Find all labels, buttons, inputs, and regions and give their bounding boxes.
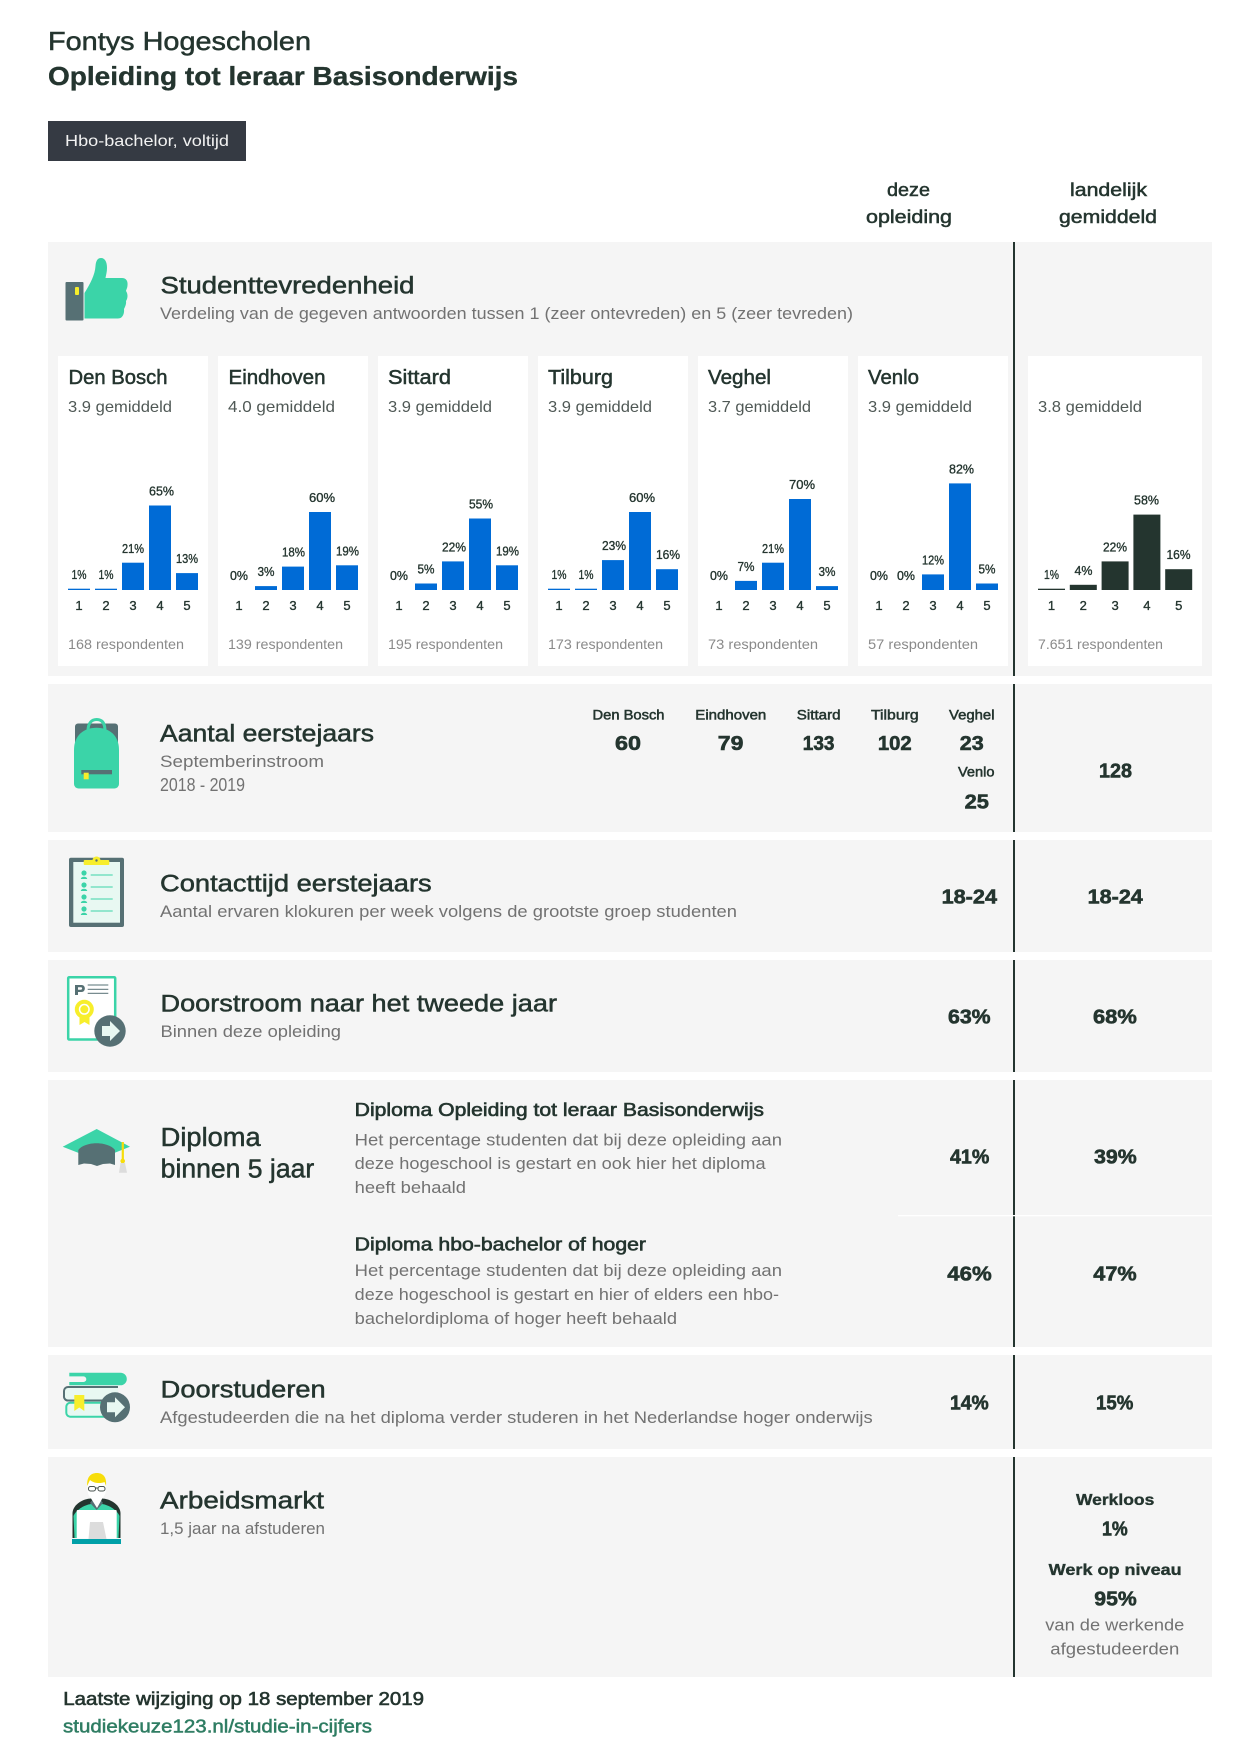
bar chart: Tilburg: 3 xyxy=(609,598,617,613)
subheading: 1,5 jaar na afstuderen: 1,5 jaar na afstuderen xyxy=(160,1519,325,1538)
card: Sittard: 195 respondenten xyxy=(388,636,503,652)
bar chart: landelijk: 4 xyxy=(1143,598,1151,613)
bar chart: Tilburg: 5 xyxy=(663,598,671,613)
card: Eindhoven: 4.0 gemiddeld xyxy=(228,399,335,416)
icon: backpack xyxy=(74,720,119,788)
subheading: septemberinstroom xyxy=(160,752,324,795)
block: diploma hbo-bachelor: Diploma hbo-bachelor of hoger xyxy=(355,1235,646,1255)
stat: werk op niveau: afgestudeerden xyxy=(1050,1639,1179,1658)
bar chart: Tilburg: 1 xyxy=(555,598,563,613)
bar chart: Eindhoven: 3 xyxy=(289,598,297,613)
bar chart: Venlo: 82% xyxy=(949,461,974,476)
bar chart: Eindhoven: 3% xyxy=(258,564,275,579)
block: diploma hbo-bachelor xyxy=(355,1235,782,1328)
block: diploma opleiding: deze hogeschool is gestart en ook hier het diploma xyxy=(355,1154,766,1173)
bar chart: Sittard: 0% xyxy=(390,568,408,583)
stat: 41%: 41% xyxy=(950,1146,990,1168)
card: Tilburg xyxy=(538,356,688,666)
bar chart: Eindhoven xyxy=(230,490,359,613)
bar chart: Eindhoven: 0% xyxy=(230,568,248,583)
stat: werkloos: Werkloos xyxy=(1076,1492,1154,1509)
bar chart: Veghel: 21% xyxy=(762,541,784,556)
bar chart: Sittard xyxy=(390,496,519,613)
stat: Sittard xyxy=(797,707,841,755)
heading: diploma binnen 5 jaar xyxy=(161,1124,315,1184)
column heading: landelijk gemiddeld xyxy=(1059,180,1157,227)
stat: Veghel: Veghel xyxy=(949,707,994,722)
bar chart: Veghel: 3% xyxy=(818,564,836,579)
bar chart: Sittard: 5% xyxy=(418,562,435,576)
stat: werk op niveau xyxy=(1045,1562,1184,1658)
bar chart: Eindhoven: 19% xyxy=(336,543,359,558)
bar chart: landelijk xyxy=(1038,493,1192,613)
subheading: verdeling: Verdeling van de gegeven antwoorden tussen 1 (zeer ontevreden) en 5 (zeer tevreden) xyxy=(160,304,853,323)
bar chart: Tilburg: 1% xyxy=(578,567,594,582)
bar chart: Sittard: 2 xyxy=(422,598,430,613)
card: Venlo xyxy=(858,356,1008,666)
bar chart: Venlo: 1 xyxy=(875,598,883,613)
column heading: deze opleiding xyxy=(866,180,952,227)
stat: Den Bosch xyxy=(592,707,664,755)
bar chart: Den Bosch: 13% xyxy=(176,551,198,566)
bar chart: landelijk: 4% xyxy=(1074,563,1093,578)
title: Fontys Hogescholen xyxy=(48,26,311,56)
icon: thumbs up xyxy=(66,258,128,320)
card: Den Bosch: 168 respondenten xyxy=(68,636,184,652)
card: Den Bosch: Den Bosch xyxy=(68,367,168,389)
stat: landelijk: 128 xyxy=(1099,761,1132,783)
bar chart: landelijk: 1 xyxy=(1048,598,1055,613)
bar chart: Den Bosch: 1% xyxy=(98,567,114,582)
heading: doorstroom: Doorstroom naar het tweede jaar xyxy=(160,991,557,1018)
stat: Den Bosch: Den Bosch xyxy=(592,707,664,722)
card: Venlo: 57 respondenten xyxy=(868,636,978,652)
stat: deze opleiding: 18-24 xyxy=(942,886,998,908)
block: diploma opleiding: Diploma Opleiding tot leraar Basisonderwijs xyxy=(355,1100,764,1120)
title xyxy=(48,26,518,91)
stat: landelijk: 18-24 xyxy=(1088,886,1144,908)
bar chart: Venlo: 12% xyxy=(922,552,944,567)
bar chart: Eindhoven: 4 xyxy=(316,598,324,613)
bar chart: Venlo: 2 xyxy=(902,598,910,613)
column heading: deze opleiding: opleiding xyxy=(866,207,952,227)
card: Veghel xyxy=(698,356,848,666)
card: Veghel: Veghel xyxy=(708,367,771,389)
stat: Veghel xyxy=(949,707,994,755)
bar chart: landelijk: 58% xyxy=(1134,493,1159,508)
stat: Veghel: 23 xyxy=(960,733,984,755)
bar chart: landelijk: 16% xyxy=(1166,547,1191,562)
bar chart: Den Bosch: 21% xyxy=(122,541,144,556)
bar chart: Veghel: 1 xyxy=(715,598,723,613)
stat: Eindhoven: 79 xyxy=(718,733,743,755)
subheading: binnen deze opleiding: Binnen deze opleiding xyxy=(160,1022,341,1041)
badge: opleidingsvorm xyxy=(48,121,246,161)
card: Veghel: 73 respondenten xyxy=(708,636,818,652)
panel: doorstroom xyxy=(48,960,1212,1072)
bar chart: Veghel: 4 xyxy=(796,598,804,613)
panel: aantal eerstejaars xyxy=(48,684,1212,832)
bar chart: Tilburg: 2 xyxy=(582,598,590,613)
bar chart: landelijk: 3 xyxy=(1111,598,1119,613)
card: Tilburg: 173 respondenten xyxy=(548,636,663,652)
stat: Eindhoven xyxy=(695,707,766,755)
card: Den Bosch: 3.9 gemiddeld xyxy=(68,399,172,416)
stat: deze opleiding: 14% xyxy=(950,1392,989,1414)
bar chart: Venlo: 3 xyxy=(929,598,937,613)
block: diploma hbo-bachelor: deze hogeschool is gestart en hier of elders een hbo- xyxy=(355,1285,779,1304)
subheading: septemberinstroom: Septemberinstroom xyxy=(160,752,324,771)
stat: werk op niveau: Werk op niveau xyxy=(1049,1562,1182,1579)
bar chart: Venlo: 4 xyxy=(956,598,964,613)
bar chart: Veghel: 5 xyxy=(823,598,831,613)
card: landelijk gemiddeld xyxy=(1028,356,1202,666)
column heading: deze opleiding: deze xyxy=(887,180,930,200)
card: Eindhoven xyxy=(218,356,368,666)
card: Eindhoven: Eindhoven xyxy=(228,367,326,389)
bar chart: Den Bosch: 65% xyxy=(149,484,174,498)
bar chart: landelijk: 5 xyxy=(1175,598,1182,613)
panel: contacttijd eerstejaars xyxy=(48,840,1212,952)
bar chart: Venlo xyxy=(870,461,998,613)
bar chart: Veghel: 0% xyxy=(710,568,728,583)
panel: studenttevredenheid xyxy=(48,242,1212,676)
bar chart: Sittard: 4 xyxy=(476,598,484,613)
bar chart: Eindhoven: 60% xyxy=(309,490,335,505)
stat: Venlo xyxy=(958,765,994,813)
icon: books with arrow xyxy=(64,1373,130,1422)
bar chart: Eindhoven: 1 xyxy=(235,598,243,613)
stat: Venlo: 25 xyxy=(965,791,989,813)
block: diploma opleiding xyxy=(355,1100,782,1197)
card: landelijk gemiddeld: 7.651 respondenten xyxy=(1038,636,1163,652)
stat: 39%: 39% xyxy=(1094,1146,1137,1168)
bar chart: Veghel: 2 xyxy=(742,598,750,613)
bar chart: Tilburg: 60% xyxy=(629,490,655,505)
column heading: landelijk gemiddeld: landelijk xyxy=(1070,180,1148,200)
bar chart: Den Bosch: 1 xyxy=(75,598,83,613)
bar chart: Veghel: 70% xyxy=(789,477,815,492)
card: Tilburg: Tilburg xyxy=(548,367,613,389)
bar chart: Sittard: 19% xyxy=(496,543,519,558)
panel: doorstuderen xyxy=(48,1355,1212,1449)
stat: Den Bosch: 60 xyxy=(615,733,641,755)
bar chart: Den Bosch: 4 xyxy=(156,598,164,613)
stat: Eindhoven: Eindhoven xyxy=(695,707,766,722)
stat: werkloos xyxy=(1076,1492,1154,1540)
bar chart: Venlo: 5% xyxy=(978,562,996,576)
stat: 46%: 46% xyxy=(947,1263,992,1285)
title: Opleiding tot leraar Basisonderwijs xyxy=(48,61,518,91)
card: Sittard: Sittard xyxy=(388,367,451,389)
stat: Tilburg: 102 xyxy=(878,733,912,755)
panel: diploma binnen 5 jaar xyxy=(48,1080,1212,1347)
bar chart: Venlo: 0% xyxy=(870,568,888,583)
footer: laatste wijziging: Laatste wijziging op 18 september 2019 xyxy=(63,1689,424,1709)
card: Veghel: 3.7 gemiddeld xyxy=(708,399,811,416)
stat: Tilburg xyxy=(871,707,919,755)
bar chart: landelijk: 2 xyxy=(1080,598,1087,613)
stat: werk op niveau: 95% xyxy=(1094,1588,1137,1610)
card: landelijk gemiddeld: 3.8 gemiddeld xyxy=(1038,399,1142,416)
bar chart: Tilburg: 16% xyxy=(656,547,680,562)
card: Den Bosch xyxy=(58,356,208,666)
card: Eindhoven: 139 respondenten xyxy=(228,636,343,652)
icon: clipboard xyxy=(69,856,124,927)
block: diploma opleiding: Het percentage studenten dat bij deze opleiding aan xyxy=(355,1130,782,1149)
subheading: afgestudeerden: Afgestudeerden die na het diploma verder studeren in het Nederlandse hoger onderwijs xyxy=(160,1408,873,1427)
bar chart: Eindhoven: 18% xyxy=(282,545,305,560)
heading: aantal eerstejaars: Aantal eerstejaars xyxy=(160,721,374,748)
card: Tilburg: 3.9 gemiddeld xyxy=(548,399,652,416)
column heading: landelijk gemiddeld: gemiddeld xyxy=(1059,207,1157,227)
icon: certificate with arrow xyxy=(68,977,126,1047)
stat: 47%: 47% xyxy=(1093,1263,1137,1285)
bar chart: Veghel: 3 xyxy=(769,598,777,613)
card: Venlo: 3.9 gemiddeld xyxy=(868,399,972,416)
card: Venlo: Venlo xyxy=(868,367,919,389)
badge: opleidingsvorm: Hbo-bachelor, voltijd xyxy=(65,133,229,150)
stat: landelijk: 15% xyxy=(1096,1392,1134,1414)
bar chart: Sittard: 55% xyxy=(469,496,493,512)
stat: werk op niveau: van de werkende xyxy=(1045,1616,1184,1635)
card: Sittard: 3.9 gemiddeld xyxy=(388,399,492,416)
bar chart: Tilburg: 1% xyxy=(552,567,567,582)
bar chart: landelijk: 1% xyxy=(1044,567,1059,582)
bar chart: Sittard: 1 xyxy=(395,598,403,613)
bar chart: Den Bosch xyxy=(68,484,198,613)
stat: landelijk: 68% xyxy=(1093,1006,1137,1028)
heading: diploma binnen 5 jaar: binnen 5 jaar xyxy=(161,1156,315,1184)
bar chart: Veghel: 7% xyxy=(738,559,755,574)
bar chart: Venlo: 0% xyxy=(897,568,915,583)
heading: arbeidsmarkt: Arbeidsmarkt xyxy=(160,1488,324,1515)
heading: studenttevredenheid: Studenttevredenheid xyxy=(160,272,414,299)
bar chart: Tilburg: 4 xyxy=(636,598,644,613)
stat: deze opleiding: 63% xyxy=(948,1006,991,1028)
bar chart: Sittard: 5 xyxy=(503,598,511,613)
heading: contacttijd eerstejaars: Contacttijd eerstejaars xyxy=(160,871,432,898)
bar chart: Venlo: 5 xyxy=(983,598,991,613)
bar chart: Sittard: 22% xyxy=(442,539,466,554)
card: Sittard xyxy=(378,356,528,666)
heading: diploma binnen 5 jaar: Diploma xyxy=(161,1124,262,1152)
bar chart: Eindhoven: 5 xyxy=(343,598,351,613)
block: diploma hbo-bachelor: bachelordiploma of hoger heeft behaald xyxy=(355,1309,677,1328)
bar chart: Tilburg xyxy=(548,490,680,613)
bar chart: Den Bosch: 1% xyxy=(72,567,87,582)
bar chart: landelijk: 22% xyxy=(1103,539,1127,554)
footer: link: studiekeuze123.nl/studie-in-cijfers xyxy=(63,1717,372,1737)
block: diploma hbo-bachelor: Het percentage studenten dat bij deze opleiding aan xyxy=(355,1261,782,1280)
subheading: klokuren: Aantal ervaren klokuren per week volgens de grootste groep studenten xyxy=(160,902,737,921)
bar chart: Sittard: 3 xyxy=(449,598,457,613)
bar chart: Den Bosch: 3 xyxy=(129,598,137,613)
bar chart: Den Bosch: 2 xyxy=(102,598,110,613)
bar chart: Tilburg: 23% xyxy=(602,538,626,553)
heading: doorstuderen: Doorstuderen xyxy=(161,1377,326,1404)
stat: Sittard: 133 xyxy=(803,733,834,755)
bar chart: Den Bosch: 5 xyxy=(183,598,191,613)
stat: Tilburg: Tilburg xyxy=(871,707,919,722)
panel: arbeidsmarkt xyxy=(48,1457,1212,1677)
block: diploma opleiding: heeft behaald xyxy=(355,1178,466,1197)
stat: Sittard: Sittard xyxy=(797,707,841,722)
icon: graduation cap xyxy=(63,1129,130,1173)
stat: Venlo: Venlo xyxy=(958,765,994,780)
stat: werkloos: 1% xyxy=(1102,1518,1128,1540)
subheading: septemberinstroom: 2018 - 2019 xyxy=(160,775,245,795)
icon: person behind laptop xyxy=(72,1473,121,1544)
bar chart: Eindhoven: 2 xyxy=(262,598,270,613)
bar chart: Veghel xyxy=(710,477,838,613)
